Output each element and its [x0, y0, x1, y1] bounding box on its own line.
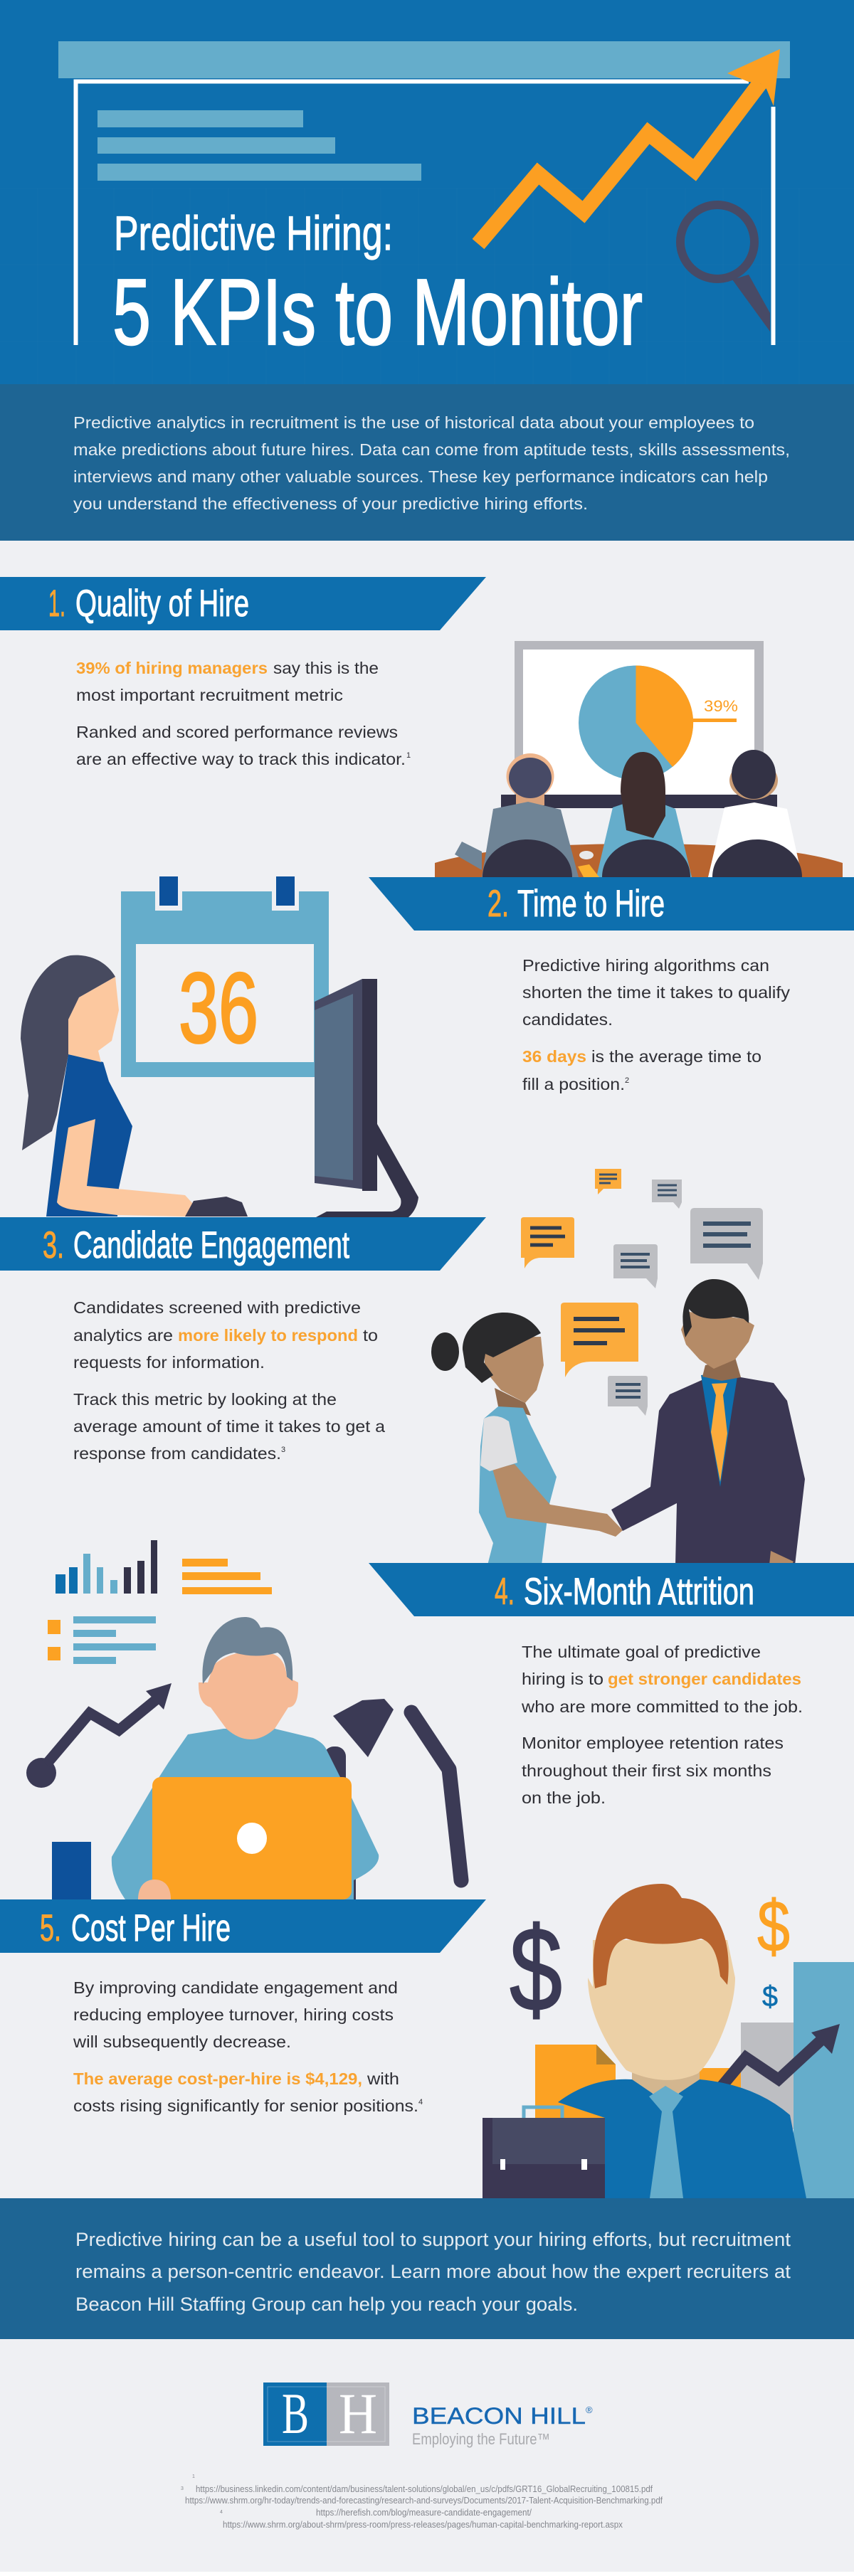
heading banner: 1. — [48, 583, 65, 625]
heading banner: 3. — [43, 1224, 64, 1266]
orange bars — [182, 1559, 272, 1594]
businessman — [558, 1884, 806, 2198]
icon: desk lamp — [333, 1699, 461, 1880]
body text: 3 — [281, 1446, 285, 1454]
body text: Predictive hiring algorithms can — [522, 956, 769, 975]
body text — [73, 1978, 423, 2115]
dollar signs: $ — [510, 1902, 562, 2036]
title: Predictive Hiring: — [114, 206, 393, 260]
body text: The average cost-per-hire is $4,129, — [73, 2069, 362, 2088]
body text: Ranked and scored performance reviews — [76, 723, 398, 741]
body text: fill a position. — [522, 1075, 625, 1093]
body text: hiring is to — [522, 1670, 603, 1688]
cup and papers — [578, 851, 599, 877]
heading banner — [0, 577, 486, 630]
body text — [521, 1643, 803, 1807]
header panel — [0, 0, 854, 384]
footnote sources: 1 — [192, 2474, 195, 2479]
section 3: candidate engagement — [0, 1217, 486, 1463]
illustration: man at laptop with charts — [26, 1540, 461, 1899]
body text: Track this metric by looking at the — [73, 1390, 337, 1409]
heading banner — [369, 1563, 854, 1616]
body text: Monitor employee retention rates — [522, 1734, 784, 1752]
projector screen — [515, 641, 764, 795]
chat bubbles — [521, 1169, 763, 1416]
footnote sources: 4 — [220, 2510, 223, 2515]
white frame — [75, 81, 773, 345]
body text: 36 days — [522, 1047, 586, 1066]
illustration: businessman with charts and dollars — [483, 1884, 854, 2198]
title: 5 KPIs to Monitor — [112, 260, 643, 364]
footnote sources: https://www.shrm.org/about-shrm/press-room/press-releases/pages/human-capital-benchmarking-report.aspx — [223, 2519, 623, 2530]
bar chart — [56, 1540, 157, 1594]
woman — [21, 955, 248, 1217]
body text: will subsequently decrease. — [73, 2032, 291, 2051]
body text: reducing employee turnover, hiring costs — [73, 2005, 394, 2024]
audience member right — [708, 750, 802, 877]
intro band: interviews and many other valuable sources. These key performance indicators can help — [73, 467, 768, 486]
closing band: Beacon Hill Staffing Group can help you reach your goals. — [75, 2294, 578, 2315]
man in suit — [611, 1279, 805, 1565]
closing band: Predictive hiring can be a useful tool to support your hiring efforts, but recruitment — [75, 2229, 791, 2250]
intro band: make predictions about future hires. Data can come from aptitude tests, skills assessments, — [73, 440, 790, 459]
body text: throughout their first six months — [522, 1761, 771, 1780]
heading banner — [369, 877, 854, 931]
section 2: time to hire — [369, 877, 854, 1093]
heading banner: Cost Per Hire — [71, 1907, 231, 1949]
body text: By improving candidate engagement and — [73, 1978, 398, 1997]
logo: Beacon Hill: BEACON HILL — [412, 2403, 586, 2429]
body text: is the average time to — [591, 1047, 761, 1066]
section 1: quality of hire — [0, 577, 486, 768]
woman shaking hands — [431, 1313, 623, 1565]
body text: 2 — [625, 1076, 629, 1085]
illustration: presentation audience — [435, 641, 843, 877]
heading banner: Six-Month Attrition — [524, 1571, 754, 1613]
body text: requests for information. — [73, 1353, 265, 1372]
man with laptop — [112, 1617, 379, 1899]
footnote sources — [181, 2474, 663, 2530]
body text: The ultimate goal of predictive — [522, 1643, 761, 1661]
heading banner — [0, 1899, 486, 1953]
body text: on the job. — [522, 1788, 606, 1807]
section 5: cost per hire — [0, 1899, 486, 2115]
logo: Beacon Hill: B — [282, 2381, 309, 2446]
icon: magnifying glass — [680, 205, 770, 332]
icon: dark arrow — [717, 2024, 840, 2092]
laptop — [152, 1777, 352, 1899]
heading banner: Quality of Hire — [75, 583, 249, 625]
illustration: calendar and woman at monitor — [21, 876, 418, 1217]
footnote sources: https://www.shrm.org/hr-today/trends-and-forecasting/research-and-surveys/Documents/2017-Talent-Acquisition-Benchmarking.pdf — [185, 2495, 663, 2506]
icon: dark arrow — [26, 1683, 172, 1788]
dollar signs: $ — [757, 1886, 790, 1967]
closing band: remains a person-centric endeavor. Learn more about how the expert recruiters at — [75, 2261, 791, 2282]
body text: Candidates screened with predictive — [73, 1298, 361, 1317]
logo: Beacon Hill — [263, 2381, 593, 2448]
monitor — [315, 979, 418, 1217]
intro band: you understand the effectiveness of your predictive hiring efforts. — [73, 494, 588, 513]
pie chart 39 percent: 39% — [704, 697, 738, 715]
body text: most important recruitment metric — [76, 686, 343, 704]
intro band — [0, 384, 854, 541]
body text — [73, 1298, 385, 1463]
body text: 39% of hiring managers — [76, 659, 268, 677]
heading banner: Time to Hire — [517, 883, 665, 925]
body text: say this is the — [273, 659, 379, 677]
footnote sources: https://business.linkedin.com/content/dam/business/talent-solutions/global/en_us/c/pdfs/GRT16_GlobalRecruiting_100815.pdf — [196, 2484, 653, 2494]
footnote sources: 3 — [181, 2486, 184, 2491]
calendar — [121, 876, 329, 1077]
audience member left — [455, 753, 579, 877]
section 4: six-month attrition — [369, 1563, 854, 1807]
logo: Beacon Hill: Employing the Future™ — [412, 2430, 550, 2448]
heading banner — [0, 1217, 486, 1271]
body text: get stronger candidates — [608, 1670, 801, 1688]
blue block — [52, 1842, 91, 1899]
body text: who are more committed to the job. — [521, 1697, 803, 1716]
body text — [76, 659, 411, 768]
audience member centre — [596, 752, 692, 877]
heading banner: 5. — [40, 1907, 61, 1949]
title — [112, 206, 643, 364]
logo: Beacon Hill: H — [339, 2381, 377, 2446]
table — [435, 844, 843, 877]
dollar signs: $ — [762, 1980, 778, 2013]
body text: to — [363, 1326, 378, 1345]
pie chart 39 percent — [579, 665, 738, 780]
body text: response from candidates. — [73, 1444, 281, 1463]
legend list — [48, 1616, 156, 1664]
closing band — [0, 2198, 854, 2339]
body text: 1 — [406, 751, 411, 760]
body text: candidates. — [522, 1010, 613, 1029]
intro band: Predictive analytics in recruitment is the use of historical data about your employees to — [73, 413, 754, 432]
body text — [522, 956, 791, 1093]
body text: costs rising significantly for senior positions. — [73, 2097, 418, 2115]
heading banner: 2. — [487, 883, 509, 925]
top bar — [58, 41, 790, 78]
footnote sources: https://herefish.com/blog/measure-candidate-engagement/ — [316, 2507, 532, 2518]
body text: shorten the time it takes to qualify — [522, 983, 791, 1002]
logo: Beacon Hill: ® — [586, 2405, 593, 2415]
chart bars and document — [535, 1962, 854, 2198]
icon: rising arrow — [478, 49, 780, 244]
body text: analytics are — [73, 1326, 173, 1345]
body text: are an effective way to track this indicator. — [76, 750, 406, 768]
body text: average amount of time it takes to get a — [73, 1417, 385, 1436]
body text: with — [367, 2069, 399, 2088]
heading banner: Candidate Engagement — [73, 1224, 349, 1266]
text placeholder bars — [97, 110, 421, 181]
body text: more likely to respond — [178, 1326, 358, 1345]
dollar signs — [510, 1886, 790, 2036]
illustration: handshake and chat bubbles — [431, 1169, 805, 1565]
briefcase — [483, 2107, 605, 2198]
calendar: 36 — [179, 952, 258, 1064]
body text: 4 — [418, 2098, 423, 2106]
heading banner: 4. — [495, 1571, 515, 1613]
